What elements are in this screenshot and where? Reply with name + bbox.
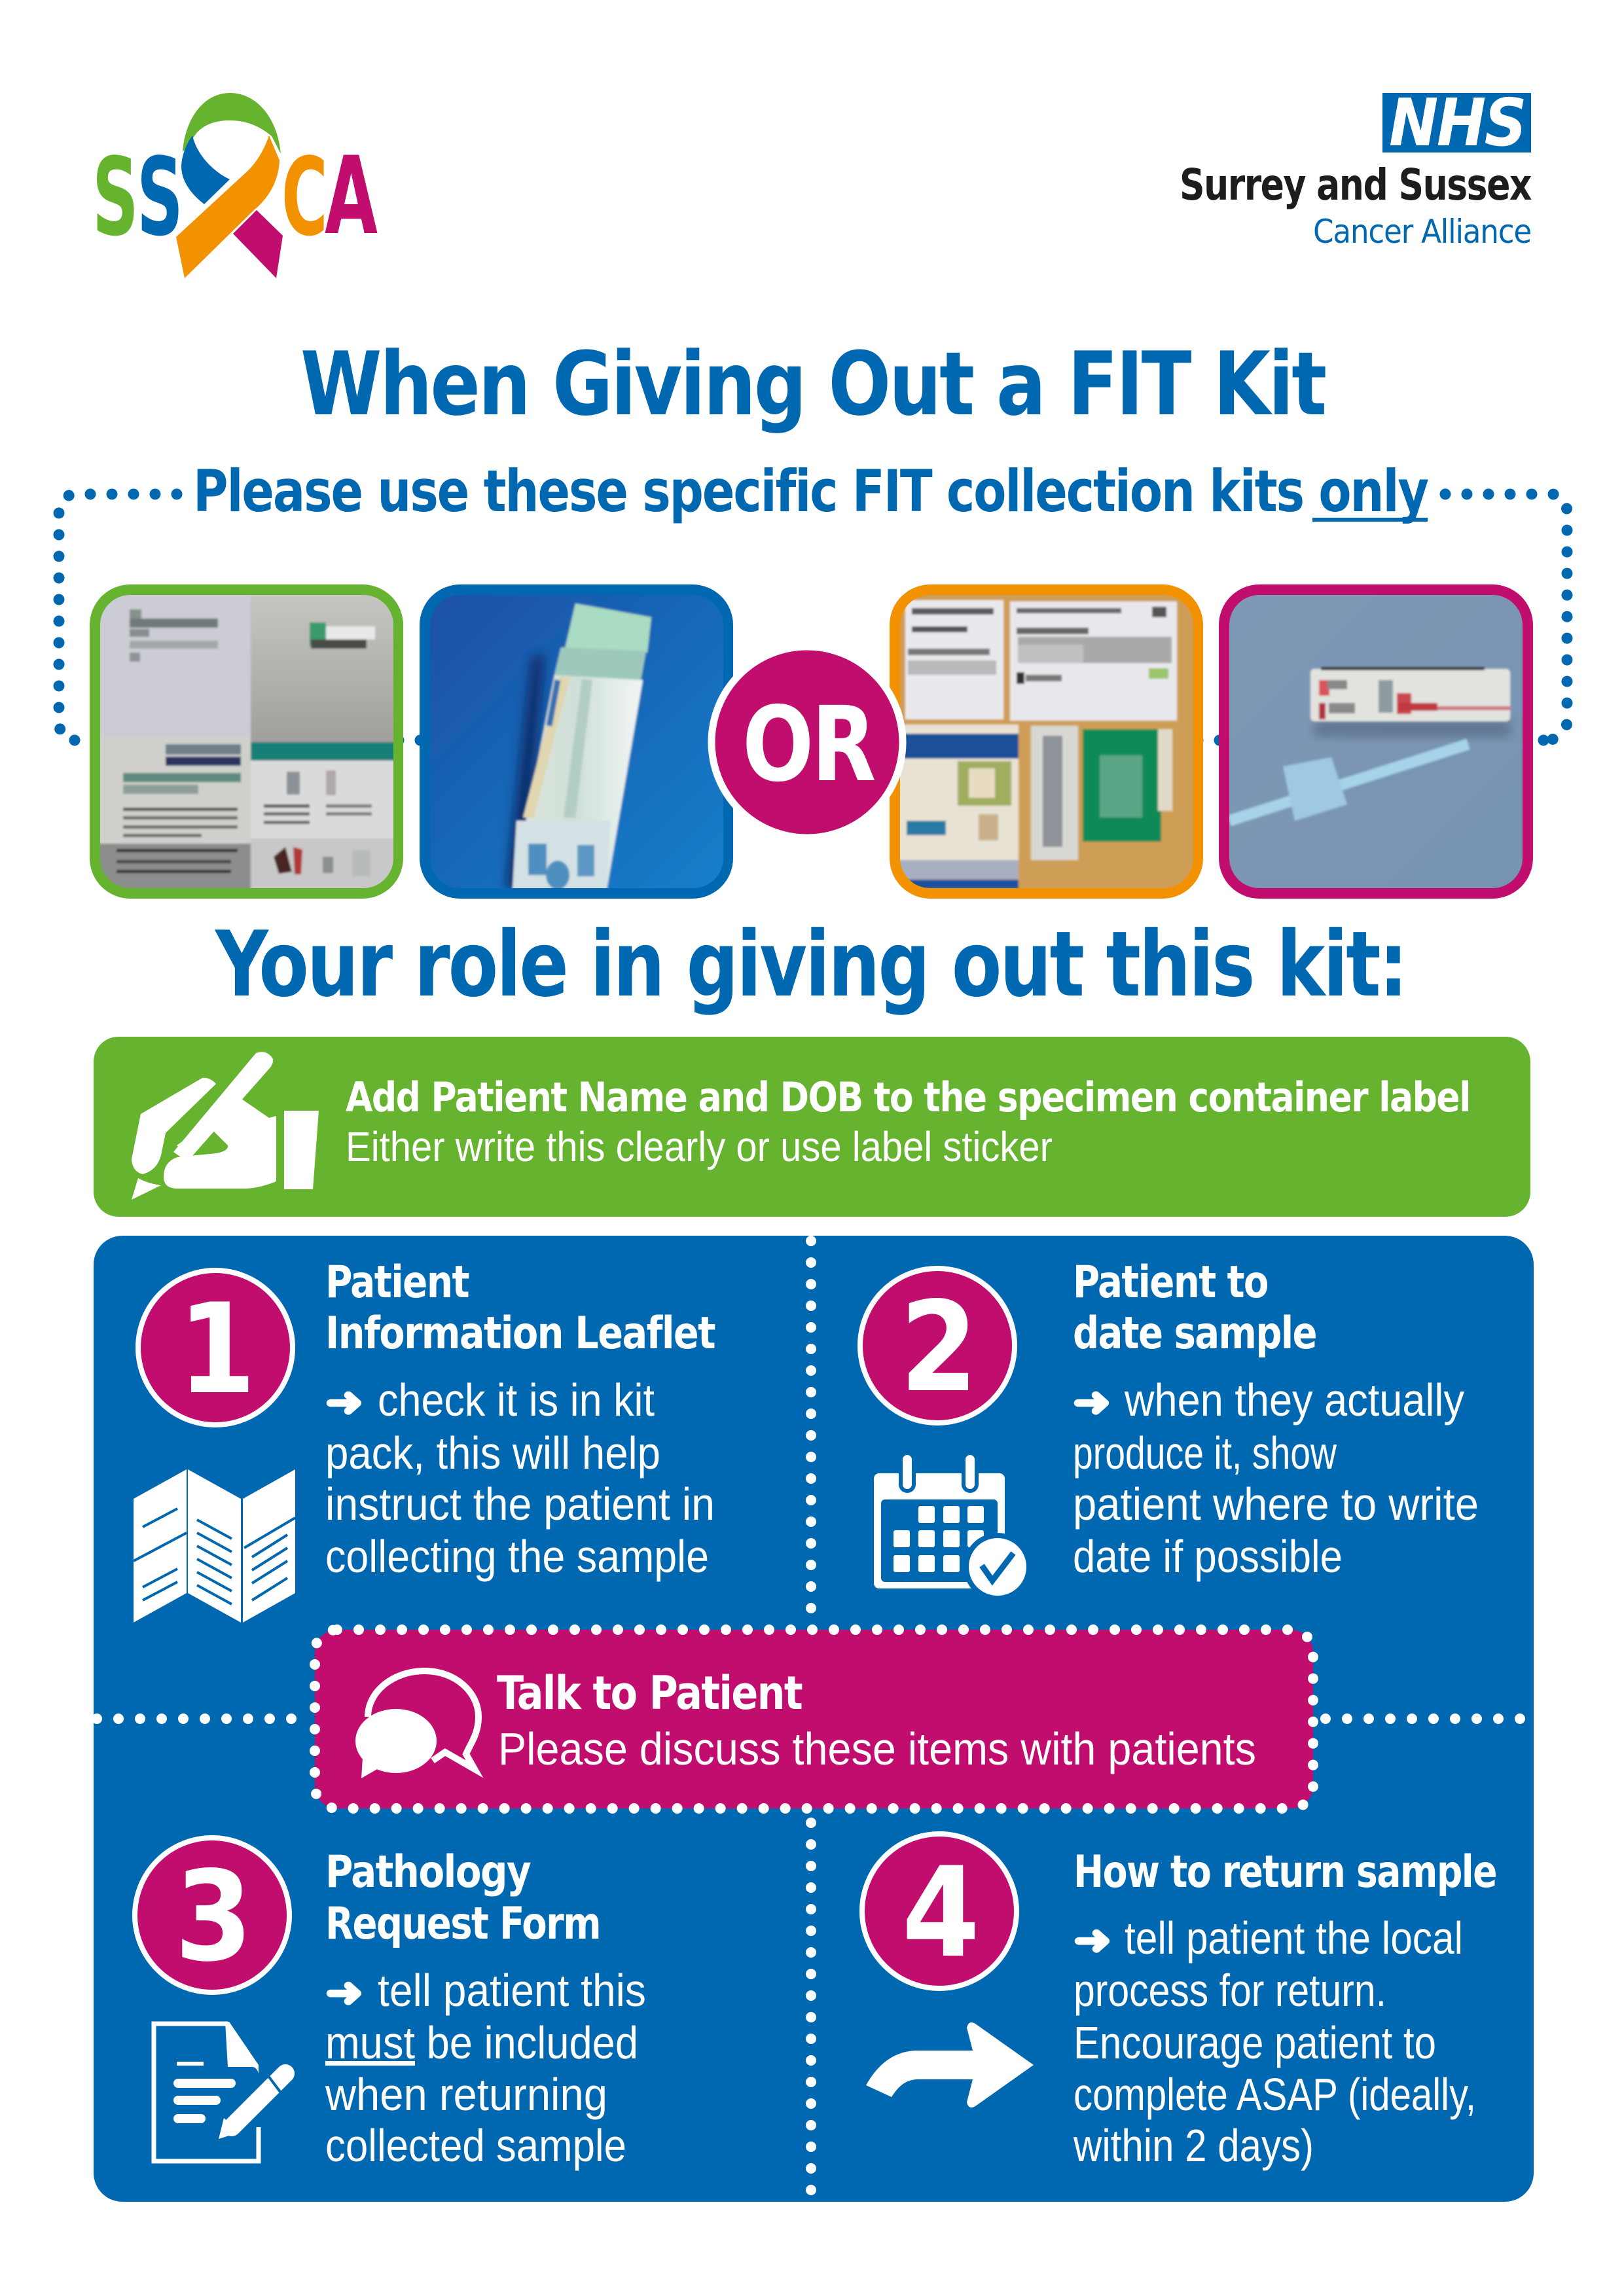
subtitle: Please use these specific FIT collection kits only: [193, 457, 1428, 525]
badge 1: [138, 1270, 293, 1425]
NHS logo: [1180, 84, 1532, 251]
heading 4: How to return sample: [1074, 1846, 1496, 1898]
heading: talk: Talk to Patient: [497, 1666, 803, 1720]
panel: steps: [94, 1236, 1534, 2202]
step 3: [135, 1838, 646, 2171]
text 3: when returning: [325, 2069, 607, 2120]
heading 3: Pathology: [325, 1846, 531, 1898]
text 2: produce it, show: [1073, 1427, 1337, 1479]
text 4: within 2 days): [1073, 2120, 1314, 2171]
text 1: check it is in kit: [378, 1374, 655, 1426]
NHS box: NHS: [1389, 84, 1525, 161]
text 4: Encourage patient to: [1074, 2017, 1436, 2068]
badge 4: 4: [902, 1840, 977, 1985]
icon: calendar: [874, 1460, 1032, 1601]
text 1: ➜: [325, 1378, 363, 1426]
photo: kit 1 green frame: [90, 584, 403, 899]
panel: add patient name: [94, 1037, 1530, 1217]
heading 2: date sample: [1073, 1308, 1316, 1359]
text: label note: Either write this clearly or use label sticker: [346, 1123, 1053, 1170]
heading: add patient: Add Patient Name and DOB to the specimen container label: [346, 1073, 1470, 1121]
text 3: tell patient this: [378, 1965, 646, 2016]
heading: your role: Your role in giving out this kit:: [214, 912, 1406, 1017]
Surrey and Sussex: Surrey and Sussex: [1180, 160, 1532, 210]
step 2: [860, 1257, 1479, 1601]
text 2: [1073, 1374, 1479, 1582]
text 1: collecting the sample: [325, 1531, 709, 1582]
logo letters SS: S: [137, 135, 181, 260]
text 4: [1073, 1912, 1476, 2171]
logo letters CA: C: [281, 135, 326, 260]
logo: SSCA ribbon: [92, 93, 378, 278]
text: discuss: Please discuss these items with patients: [498, 1723, 1256, 1774]
heading 1: Information Leaflet: [325, 1308, 715, 1359]
text 4: tell patient the local: [1125, 1912, 1463, 1964]
badge 4: [862, 1834, 1017, 1988]
icon: writing hand: [132, 1052, 319, 1200]
photo: kit 1 tube blue frame: [420, 584, 733, 899]
photo: kit 2 magenta frame: [1219, 584, 1533, 899]
text 1: [325, 1374, 715, 1582]
logo letters CA: A: [325, 134, 378, 259]
title: When Giving Out a FIT Kit: [300, 333, 1326, 435]
text 3: must be included: [325, 2017, 638, 2068]
text 3: collected sample: [325, 2120, 626, 2171]
OR badge: OR: [742, 685, 875, 805]
heading 1: Patient: [325, 1257, 469, 1308]
badge 3: 3: [175, 1844, 249, 1989]
dotted bracket around kits: [59, 494, 1567, 740]
badge 2: 2: [900, 1275, 975, 1420]
text 1: instruct the patient in: [325, 1479, 715, 1530]
badge 3: [135, 1838, 289, 1992]
text 2: when they actually: [1124, 1374, 1464, 1426]
heading 2: Patient to: [1073, 1257, 1268, 1308]
heading 3: Request Form: [325, 1898, 600, 1950]
text 2: patient where to write: [1073, 1479, 1479, 1530]
step 4: [862, 1834, 1496, 2171]
Cancer Alliance: Cancer Alliance: [1313, 213, 1531, 251]
heading 1: [325, 1257, 715, 1359]
ribbon shape: [176, 93, 283, 278]
text 3: ➜: [325, 1968, 363, 2016]
icon: return arrow: [866, 2022, 1034, 2108]
callout: talk to patient: [315, 1630, 1313, 1808]
text 4: complete ASAP (ideally,: [1074, 2069, 1476, 2120]
text 4: ➜: [1074, 1916, 1111, 1964]
OR badge: [712, 647, 903, 838]
logo letters SS: S: [92, 135, 137, 260]
icon: leaflet: [134, 1469, 295, 1623]
text 4: process for return.: [1074, 1965, 1386, 2016]
badge 1: 1: [178, 1277, 253, 1422]
text 2: date if possible: [1073, 1531, 1343, 1582]
text 2: ➜: [1073, 1378, 1111, 1426]
text 3: [325, 1965, 646, 2171]
dotted dividers: [97, 1241, 1532, 2202]
heading 2: [1073, 1257, 1316, 1359]
icon: speech bubbles: [355, 1671, 478, 1778]
photo: kit 2 orange frame: [890, 584, 1203, 899]
badge 2: [860, 1268, 1015, 1423]
heading 3: [325, 1846, 600, 1950]
text 1: pack, this will help: [325, 1427, 660, 1479]
icon: form and pen: [154, 2022, 285, 2161]
step 1: [134, 1257, 715, 1623]
